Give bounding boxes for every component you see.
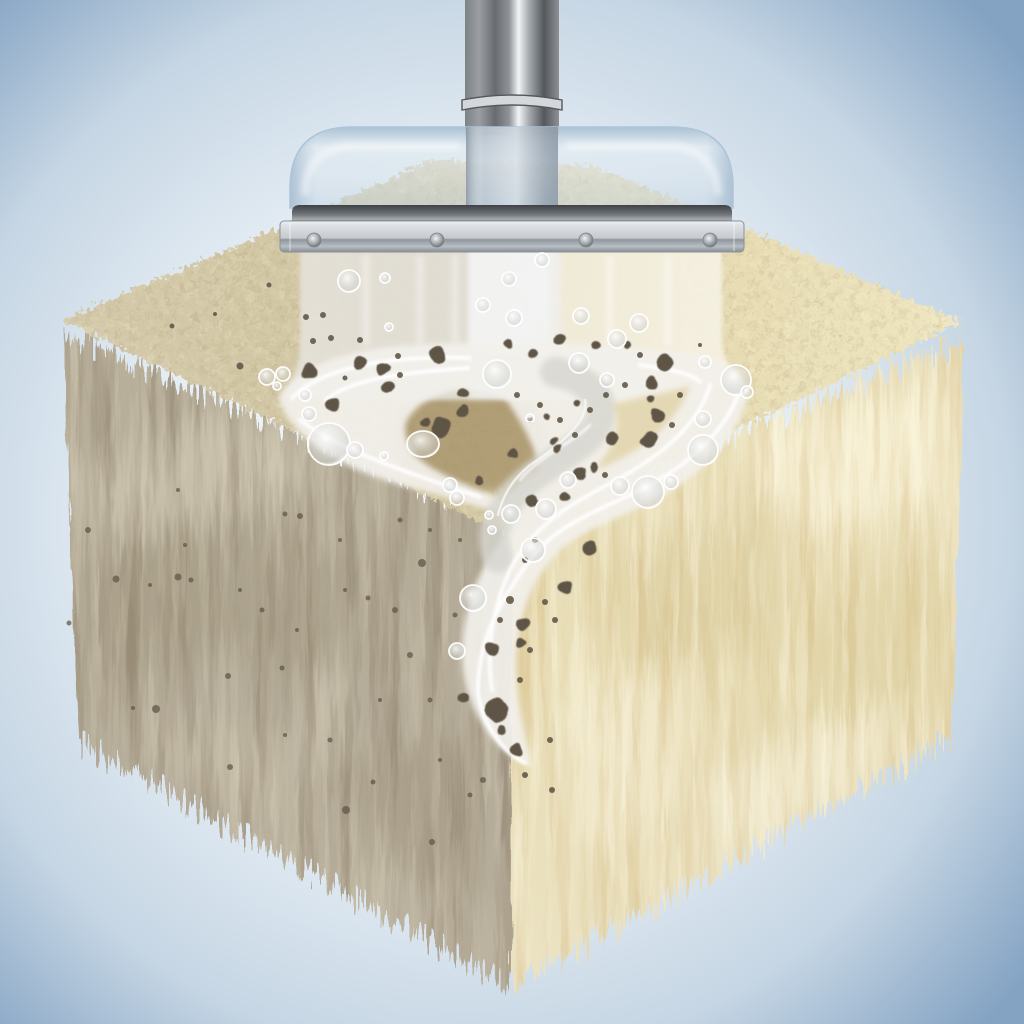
swirl channel streaks (498, 400, 586, 515)
stream sheet (282, 250, 738, 400)
silver base bar (280, 221, 744, 252)
transparent dome (290, 127, 733, 208)
left face: dirty carpet fibres (50, 325, 512, 1005)
pipe collar (462, 95, 562, 110)
swirl inner translucent channel (494, 372, 601, 558)
small dirt flecks (170, 282, 702, 793)
dome reflection (305, 146, 718, 195)
pipe inside dome (466, 127, 558, 206)
soap bubbles (259, 253, 753, 659)
carpet block (50, 150, 975, 1005)
pipe inside dome shading (466, 127, 558, 206)
dirt on the left fibres (66, 488, 486, 845)
dome edge tint (290, 127, 733, 208)
right face: clean carpet fibres (511, 335, 975, 1005)
bar end caps (290, 222, 734, 251)
stream centre column (469, 250, 549, 355)
exposed right patch (595, 385, 690, 470)
water stream falling from the head (282, 250, 738, 400)
swirl body (278, 343, 748, 768)
vacuum head (280, 0, 744, 252)
chrome pipe (465, 0, 559, 135)
dark clamp bar (292, 205, 732, 222)
stream ripples (366, 255, 668, 345)
exposed dirty centre of top face (394, 382, 546, 494)
dirt clumps on swirl and top (302, 334, 673, 756)
swirl highlights (292, 358, 738, 763)
water swirl (278, 343, 748, 768)
screws (307, 233, 717, 247)
dirt particles (66, 282, 702, 845)
top face: carpet pile (50, 150, 970, 545)
